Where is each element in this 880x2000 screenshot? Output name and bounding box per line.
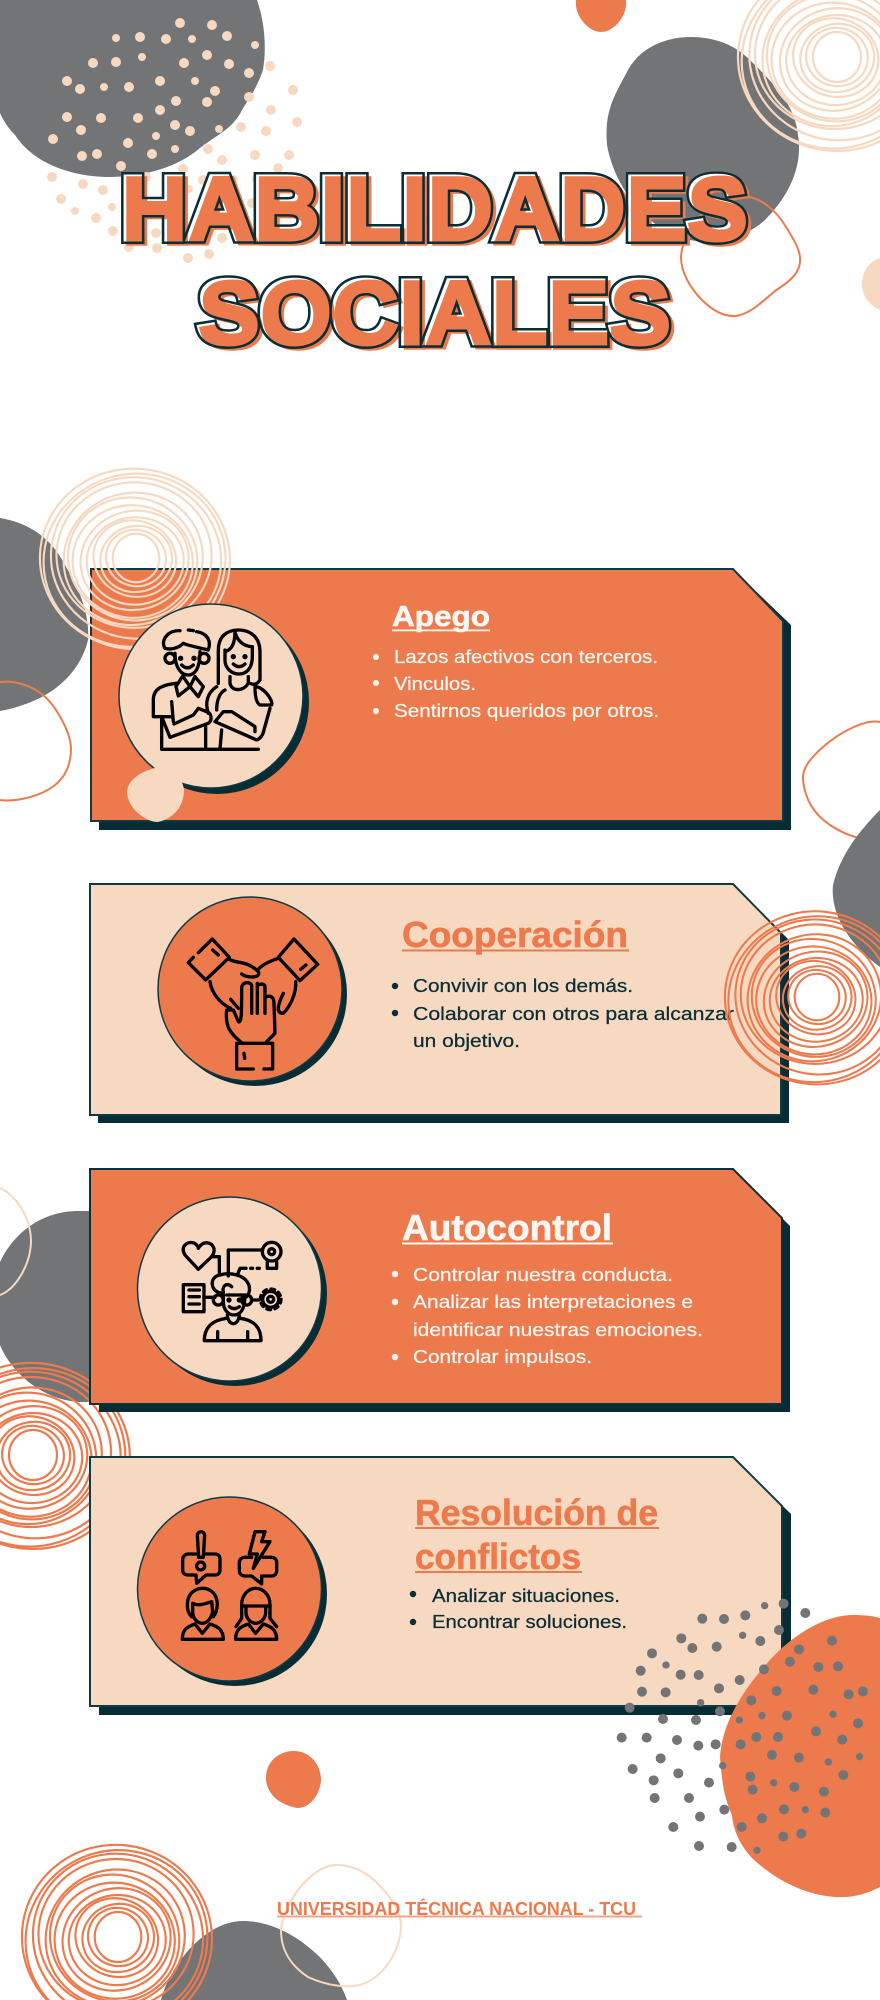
outline: left orange loop — [0, 682, 71, 800]
circle badge — [158, 897, 347, 1086]
panel body — [90, 1169, 782, 1404]
bullet list: Autocontrol: identificar nuestras emociones. — [413, 1319, 703, 1340]
bullet list: Apego: Sentirnos queridos por otros. — [394, 700, 659, 721]
bullet list: Autocontrol — [392, 1264, 703, 1367]
dots: top-left peach pattern — [47, 18, 302, 263]
panel: Cooperación — [90, 884, 789, 1123]
panel body — [90, 884, 781, 1115]
title line 1: HABILIDADES — [120, 159, 747, 259]
bullet list: Cooperación: Colaborar con otros para alcanzar — [413, 1003, 734, 1024]
heading: Resolución de conflictos: Resolución de — [415, 1492, 658, 1533]
heading: Cooperación: Cooperación — [402, 914, 628, 955]
blob: right-edge peach — [862, 258, 880, 310]
heading: Resolución de conflictos: conflictos — [415, 1536, 581, 1577]
bullet list: Autocontrol: Analizar las interpretaciones e — [413, 1291, 693, 1312]
bullet list: Apego: Lazos afectivos con terceros. — [394, 646, 658, 667]
bullet list: Cooperación: un objetivo. — [413, 1030, 520, 1051]
dots: bottom-right grey pattern — [617, 1599, 868, 1854]
rings: left orange — [0, 1351, 142, 1564]
blob: peach on badge — [127, 767, 184, 822]
title line 1: HABILIDADES — [120, 159, 747, 259]
blob: left grey by Apego — [0, 518, 88, 711]
icon: two people in conflict — [182, 1532, 277, 1639]
heading: Autocontrol: Autocontrol — [402, 1207, 612, 1248]
blob: bottom grey — [161, 1921, 347, 2000]
blob: bottom-right orange — [720, 1615, 880, 1897]
heading: Apego: Apego — [392, 601, 490, 633]
icon: person with thoughts — [183, 1242, 281, 1341]
circle badge — [138, 1197, 327, 1386]
outline: bottom peach loop — [281, 1865, 401, 1986]
panel shadow — [98, 892, 789, 1123]
title line 2: SOCIALES — [197, 263, 670, 363]
panel shadow — [99, 1465, 791, 1715]
rings: orange right over Cooperación — [713, 900, 880, 1098]
bullet list: Resolución: Encontrar soluciones. — [432, 1611, 627, 1632]
blob: left grey by Autocontrol — [0, 1211, 130, 1402]
title line 2: SOCIALES — [201, 266, 674, 366]
bullet list: Cooperación — [392, 975, 734, 1051]
bullet list: Autocontrol: Controlar nuestra conducta. — [413, 1264, 673, 1285]
panel shadow — [99, 577, 791, 830]
rings: peach over panel — [27, 457, 242, 664]
bullet list: Apego: Vinculos. — [394, 673, 476, 694]
panel: Autocontrol — [90, 1169, 790, 1412]
panel body — [91, 569, 783, 821]
bullet list: Resolución: Analizar situaciones. — [432, 1585, 620, 1606]
bullet list: Apego — [373, 646, 659, 721]
outline: right orange loop — [803, 722, 880, 839]
panel: Resolución de conflictos — [90, 1457, 791, 1715]
blob: top-right grey — [607, 37, 799, 242]
outline: left peach loop — [0, 1188, 31, 1295]
rings: bottom-left orange — [9, 1833, 224, 2000]
blob: top orange — [576, 0, 626, 32]
title: HABILIDADES SOCIALES — [121, 171, 752, 351]
title line 2: SOCIALES — [197, 263, 670, 363]
heading: Resolución de conflictos — [415, 1492, 659, 1577]
panel body — [90, 1457, 782, 1706]
outline: orange loop by the title — [681, 196, 800, 316]
blob: top-left grey — [0, 0, 265, 177]
bullet list: Autocontrol: Controlar impulsos. — [413, 1346, 592, 1367]
panel shadow — [99, 1177, 790, 1412]
icon: three hands — [188, 939, 318, 1069]
bullet list: Resolución — [410, 1585, 627, 1632]
icon: couple — [153, 630, 272, 749]
panel: Apego — [27, 457, 791, 830]
rings: top-right peach — [725, 0, 880, 166]
blob: small orange — [266, 1751, 321, 1808]
bullet list: Cooperación: Convivir con los demás. — [413, 975, 633, 996]
title line 1: HABILIDADES — [124, 162, 751, 262]
footer text: UNIVERSIDAD TÉCNICA NACIONAL - TCU — [277, 1898, 636, 1919]
blob: right grey by Cooperación — [833, 810, 880, 967]
circle badge — [119, 604, 309, 794]
circle badge — [138, 1497, 327, 1686]
